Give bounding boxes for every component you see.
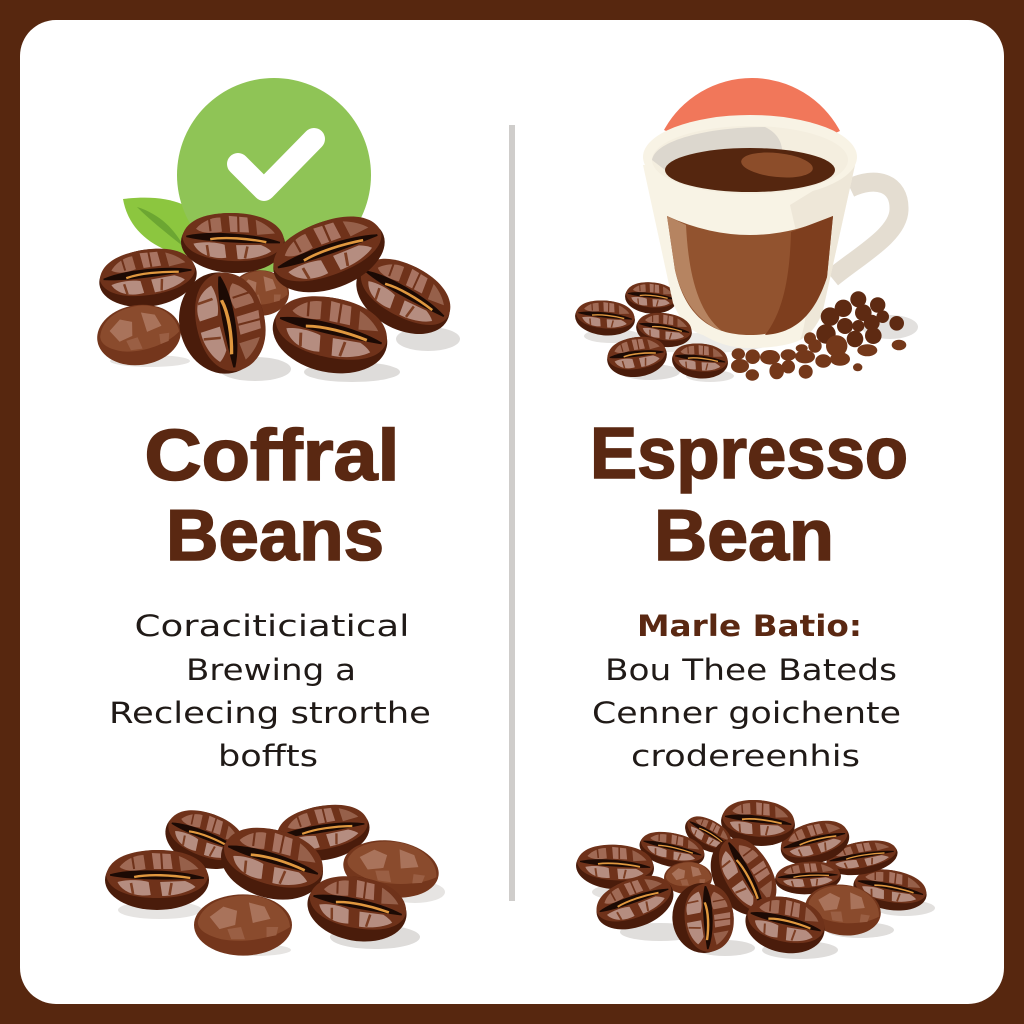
panel: Coffral Beans (93, 78, 462, 956)
icon: coffee cup with coral circle (624, 78, 899, 353)
body text: boffts (218, 739, 318, 773)
heading: Bean (654, 496, 834, 576)
body text: Brewing a (186, 653, 356, 687)
body text: Cenner goichente (592, 696, 901, 730)
body text: crodereenhis (631, 739, 860, 773)
center divider (509, 125, 515, 901)
heading: Espresso (590, 414, 908, 494)
panel: Espresso Bean (574, 78, 935, 960)
heading: Beans (166, 496, 384, 576)
body text: Reclecing strorthe (109, 696, 431, 730)
body text (592, 609, 901, 773)
body text: Bou Thee Bateds (605, 653, 897, 687)
body text: Marle Batio: (637, 609, 862, 643)
heading (590, 414, 908, 576)
bottom bean pile (575, 797, 935, 960)
icon: green check badge with leaf (123, 78, 371, 272)
body text: Coraciticiatical (134, 609, 410, 643)
heading (144, 416, 400, 576)
bottom bean pile (105, 798, 445, 956)
small beans and coffee grounds (574, 291, 918, 382)
heading: Coffral (144, 416, 400, 496)
body text (109, 609, 431, 773)
top bean pile (93, 204, 462, 383)
